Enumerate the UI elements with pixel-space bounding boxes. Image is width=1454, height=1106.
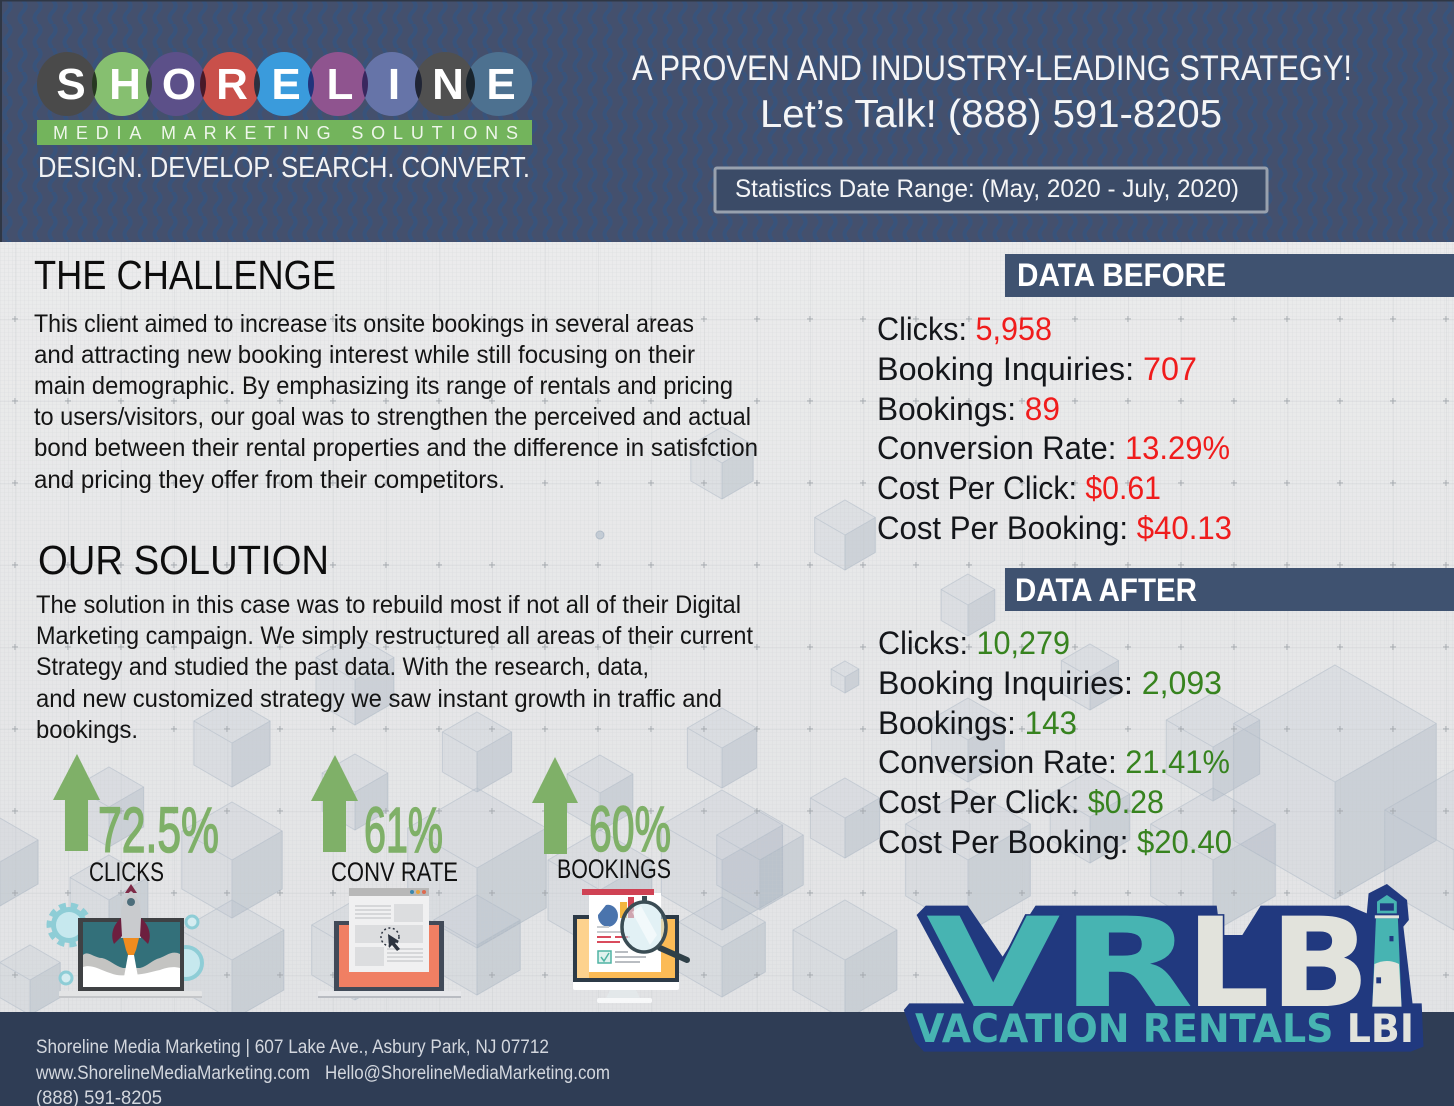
arrow: clicks up [53, 754, 100, 851]
value: bookings: 60% [589, 793, 671, 865]
logo letters: I [388, 60, 400, 109]
data list: after: Booking Inquiries: 2,093 [878, 665, 1222, 701]
logo letters: H [109, 60, 141, 109]
logo large letters [926, 892, 1370, 1036]
data list: before: Cost Per Booking: $40.13 [877, 510, 1232, 546]
data list: before: Booking Inquiries: 707 [877, 351, 1197, 387]
heading: our solution: OUR SOLUTION [38, 537, 329, 583]
text block: challenge: and attracting new booking interest while still focusing on their [34, 341, 695, 369]
logo letters: L [327, 60, 353, 109]
data list: before: Cost Per Click: $0.61 [877, 470, 1161, 506]
stat: conv rate [311, 755, 458, 887]
logo letters: N [432, 60, 464, 109]
text block: solution: Marketing campaign. We simply restructured all areas of their current [36, 622, 753, 650]
text block: solution [36, 591, 753, 744]
heading band: data before: DATA BEFORE [1017, 257, 1226, 293]
data list: after: Conversion Rate: 21.41% [878, 744, 1230, 780]
text block: challenge [34, 310, 758, 494]
logo backing shape [904, 884, 1424, 1052]
value: clicks: 72.5% [98, 794, 219, 866]
icon: monitor with report and magnifier [573, 889, 687, 1003]
value: conv rate: 61% [364, 794, 443, 866]
data list: before [877, 311, 1232, 546]
data list: before: Bookings: 89 [877, 391, 1060, 427]
icon: laptop with web page and cursor [318, 888, 461, 998]
footer contact text: Shoreline Media Marketing | 607 Lake Ave., Asbury Park, NJ 07712 [36, 1037, 549, 1058]
data list: after: Clicks: 10,279 [878, 625, 1070, 661]
icon: rocket launching from laptop [49, 884, 202, 998]
header phone line: Let’s Talk! (888) 591-8205 [760, 93, 1222, 136]
logo large letters: LB [1186, 892, 1370, 1036]
text block: solution: Strategy and studied the past data. With the research, data, [36, 653, 649, 681]
logo large letters: VR [926, 892, 1194, 1036]
statistics date range box [715, 168, 1267, 212]
icon: lighthouse [1372, 895, 1402, 1007]
data list: after: Cost Per Click: $0.28 [878, 784, 1164, 820]
label: bookings: BOOKINGS [557, 854, 671, 884]
label: clicks: CLICKS [89, 857, 164, 887]
text block: challenge: and pricing they offer from their competitors. [34, 466, 505, 494]
footer contact text [35, 1037, 610, 1106]
text block: challenge: to users/visitors, our goal was to strengthen the perceived and actual [34, 403, 751, 431]
heading band: data before [1005, 254, 1454, 297]
logo: Vacation Rentals LBI [904, 884, 1424, 1052]
footer contact text: Hello@ShorelineMediaMarketing.com [325, 1063, 610, 1084]
logo: Shoreline Media Marketing [37, 52, 532, 184]
header headline: A PROVEN AND INDUSTRY-LEADING STRATEGY! [632, 49, 1352, 88]
arrow: conv rate up [311, 755, 358, 852]
data list: after: Cost Per Booking: $20.40 [878, 824, 1232, 860]
data list: after: Bookings: 143 [878, 705, 1077, 741]
logo letters: E [486, 60, 516, 109]
stat: bookings [532, 757, 671, 884]
text block: solution: The solution in this case was to rebuild most if not all of their Digital [36, 591, 741, 619]
logo circles [37, 52, 532, 116]
logo letters: E [271, 60, 301, 109]
header banner [0, 0, 1454, 242]
statistics date range box: Statistics Date Range: (May, 2020 - July, 2020) [735, 175, 1239, 203]
data list: after [878, 625, 1232, 860]
footer contact text: www.ShorelineMediaMarketing.com [35, 1063, 310, 1084]
text block: solution: and new customized strategy we saw instant growth in traffic and [36, 685, 722, 713]
text block: challenge: This client aimed to increase its onsite bookings in several areas [34, 310, 694, 338]
heading: the challenge: THE CHALLENGE [34, 252, 336, 298]
footer bar [0, 1012, 1454, 1106]
data list: before: Clicks: 5,958 [877, 311, 1052, 347]
text block: challenge: main demographic. By emphasizing its range of rentals and pricing [34, 372, 733, 400]
text block: challenge: bond between their rental properties and the difference in satisfction [34, 434, 758, 462]
arrow: bookings up [532, 757, 578, 854]
logo letters: S [56, 60, 86, 109]
label: conv rate: CONV RATE [331, 857, 458, 887]
heading band: data after: DATA AFTER [1015, 572, 1197, 608]
logo letters: R [216, 60, 248, 109]
logo tagline: DESIGN. DEVELOP. SEARCH. CONVERT. [38, 152, 530, 184]
logo letters [56, 60, 516, 109]
stat: clicks [53, 754, 219, 887]
logo green bar: MEDIA MARKETING SOLUTIONS [53, 123, 518, 143]
logo tagline: VACATION RENTALS LBI [915, 1007, 1414, 1052]
logo letters: O [162, 60, 196, 109]
data list: before: Conversion Rate: 13.29% [877, 430, 1230, 466]
text block: solution: bookings. [36, 716, 138, 744]
heading band: data after [1005, 568, 1454, 611]
